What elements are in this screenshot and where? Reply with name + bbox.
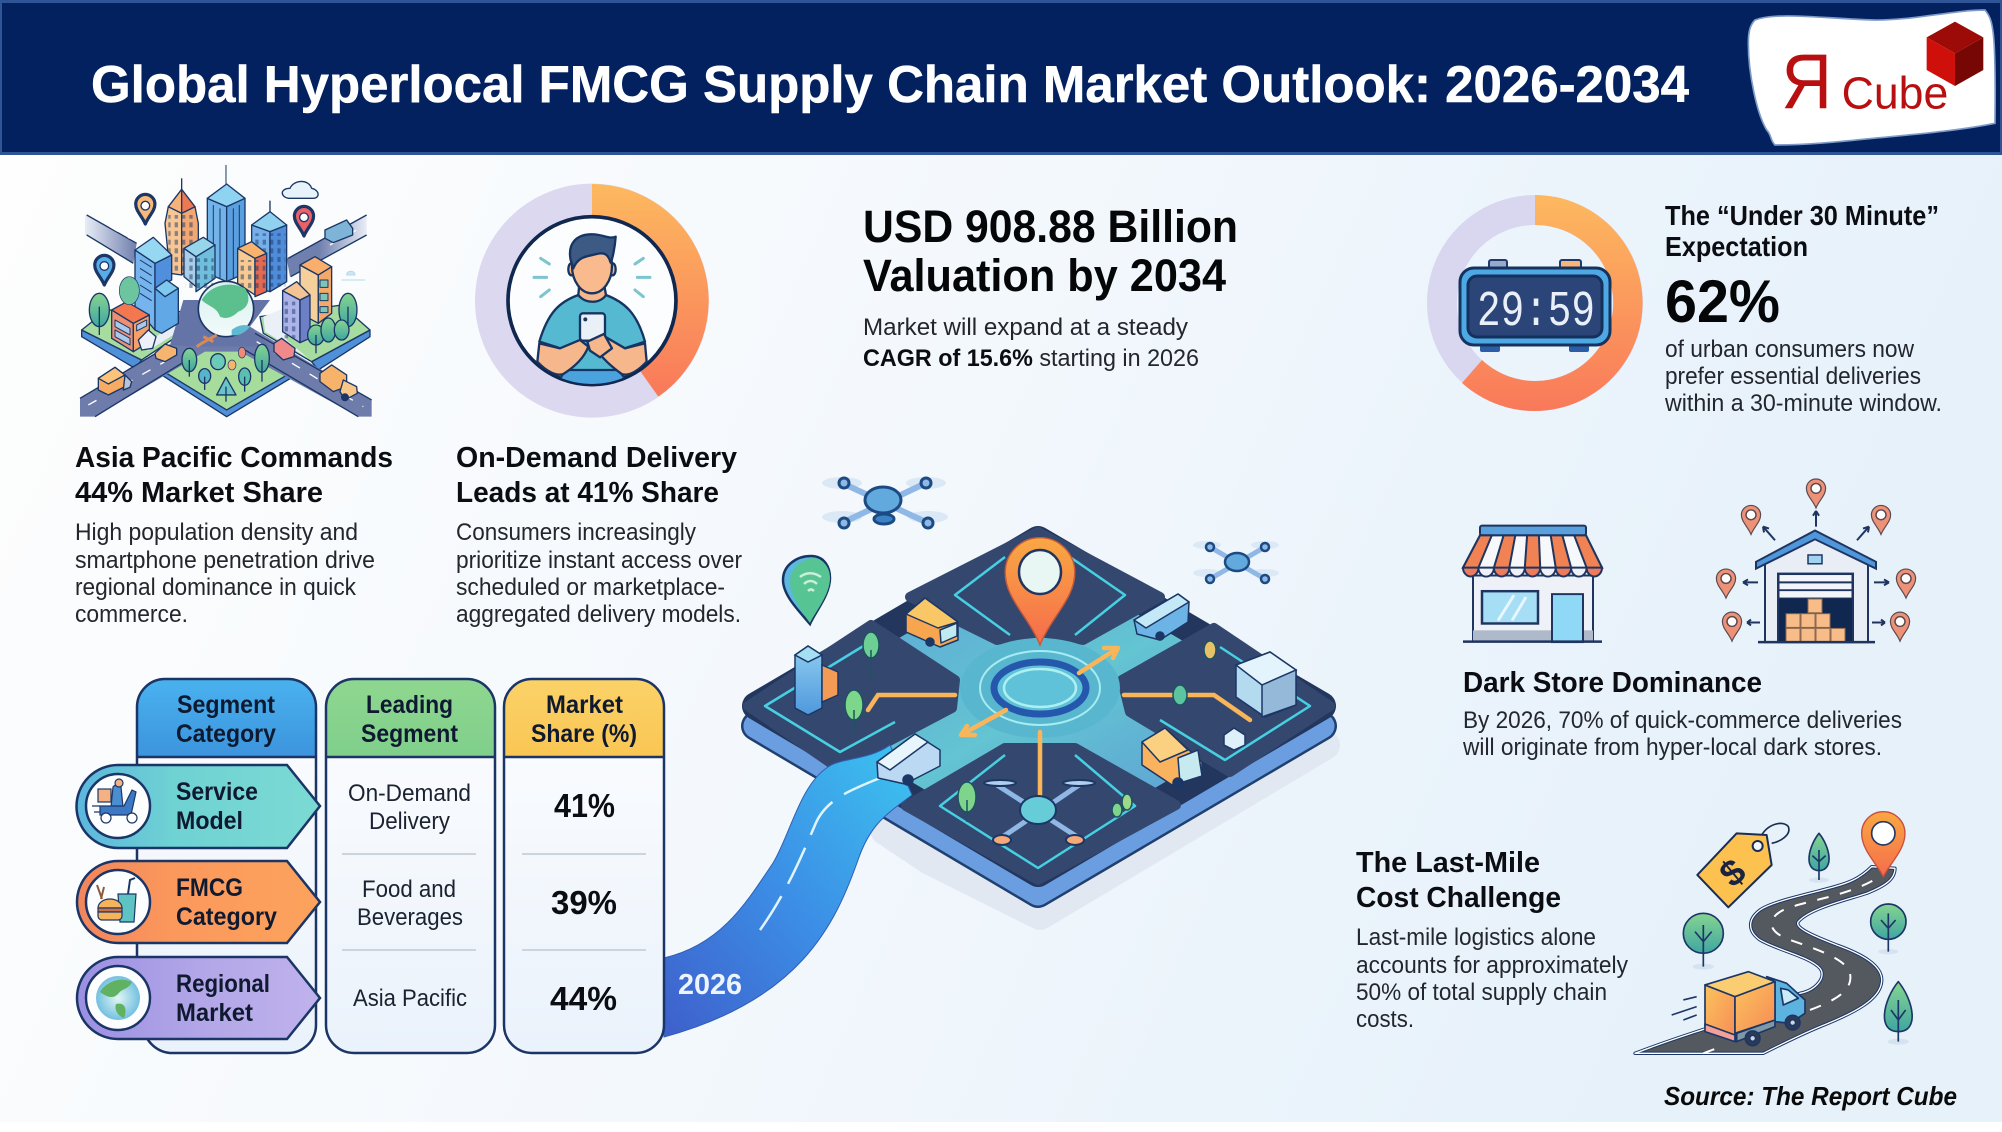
- panel: Asia Pacific: regional dominance in quick: [75, 574, 357, 601]
- central isometric delivery platform: [664, 532, 1330, 1037]
- orange route lines: [868, 648, 1250, 797]
- icon: floating drone small: [1193, 541, 1279, 583]
- panel: under 30 minute expectation: of urban consumers now: [1665, 336, 1915, 363]
- roads: [80, 215, 372, 417]
- table: leading segment column: On-Demand: [348, 780, 471, 807]
- headline stat: valuation: Valuation by 2034: [863, 250, 1226, 301]
- source note: Source: The Report Cube: [1664, 1081, 1957, 1111]
- panel: dark store dominance: By 2026, 70% of quick-commerce deliveries: [1463, 707, 1902, 734]
- table: leading segment column: Delivery: [369, 808, 450, 835]
- panel: on-demand delivery: [456, 442, 742, 628]
- panel: last-mile cost challenge: costs.: [1356, 1006, 1414, 1033]
- table: market share column: Share (%): [531, 720, 637, 748]
- purple building: [283, 282, 310, 343]
- panel: last-mile cost challenge: 50% of total supply chain: [1356, 979, 1607, 1006]
- panel: under 30 minute expectation: prefer essential deliveries: [1665, 363, 1921, 390]
- headline stat: valuation: CAGR of 15.6% starting in 2026: [863, 345, 1199, 372]
- panel: dark store dominance: [1462, 667, 1902, 761]
- trees on blocks: [845, 632, 1216, 822]
- table: leading segment column: [326, 679, 495, 1053]
- row pill: FMCG category: [77, 861, 320, 943]
- icon: digital clock: [1460, 260, 1610, 352]
- row pill: FMCG category: FMCG: [176, 874, 243, 902]
- panel: Asia Pacific: commerce.: [75, 601, 188, 628]
- table: market share column: [504, 679, 664, 1053]
- row pill: service model: Service: [176, 778, 258, 806]
- table: leading segment column: Food and: [362, 876, 456, 903]
- orange tower far right: [300, 257, 332, 323]
- icon: delivery scooter: [92, 779, 137, 823]
- headline stat: valuation: Market will expand at a steady: [863, 314, 1188, 341]
- title: Global Hyperlocal FMCG Supply Chain Market Outlook: 2026-2034: [91, 56, 1689, 114]
- icon: globe: [96, 976, 140, 1020]
- icon: isometric Asia Pacific city: [80, 165, 372, 417]
- panel: under 30 minute expectation: The “Under 30 Minute”: [1665, 200, 1939, 231]
- icon: warehouse with delivery pins: [1716, 479, 1916, 642]
- ribbon lane arrow: [760, 778, 880, 930]
- price tag: [1697, 823, 1789, 907]
- logo: RCube: Cube: [1842, 67, 1948, 118]
- icon: winding road with truck and price tag: [1635, 812, 1912, 1053]
- panel: on-demand delivery: scheduled or marketplace-: [456, 574, 725, 601]
- lane dashes: [88, 227, 363, 407]
- panel: on-demand delivery: prioritize instant access over: [456, 547, 742, 574]
- table: market share column: Market: [546, 691, 624, 719]
- table: leading segment column: Segment: [361, 720, 459, 748]
- row pill: FMCG category: Category: [176, 903, 277, 931]
- panel: last-mile cost challenge: accounts for approximately: [1356, 952, 1628, 979]
- label on ribbon: 2026: 2026: [678, 969, 742, 1001]
- platform shadow: [885, 590, 1325, 915]
- table: leading segment column: Beverages: [357, 904, 463, 931]
- vehicles: [877, 594, 1202, 788]
- skyscraper center: [207, 165, 245, 282]
- globe: [197, 281, 254, 347]
- panel: under 30 minute expectation: 62%: [1665, 268, 1780, 335]
- road ribbon from 2026: [664, 745, 912, 1037]
- donut chart: 62% with clock: [1442, 195, 1643, 411]
- red small building: [112, 302, 149, 352]
- headline stat: valuation: [863, 201, 1238, 372]
- neon lines on blocks: [765, 557, 1310, 868]
- icon: digital clock: 29:59: [1477, 284, 1595, 341]
- panel: Asia Pacific: smartphone penetration drive: [75, 547, 375, 574]
- panel: on-demand delivery: aggregated delivery models.: [456, 601, 741, 628]
- bottom white strip: [0, 1122, 2002, 1132]
- headline stat: valuation: USD 908.88 Billion: [863, 201, 1238, 252]
- panel: under 30 minute expectation: Expectation: [1665, 231, 1808, 262]
- truck: [1672, 972, 1805, 1046]
- blue tower right: [252, 201, 287, 292]
- platform side: [756, 558, 1322, 893]
- row pill: regional market: [77, 957, 320, 1039]
- logo: RCube: Я: [1781, 39, 1832, 125]
- icon: person with phone: [534, 234, 650, 393]
- panel: Asia Pacific: 44% Market Share: [75, 477, 323, 509]
- panel: on-demand delivery: Leads at 41% Share: [456, 477, 719, 509]
- icon: wifi shield: [783, 556, 830, 624]
- trees: [1683, 833, 1912, 1045]
- bottom drone: [984, 780, 1095, 845]
- panel: Asia Pacific: [75, 442, 393, 628]
- trucks and cars: [98, 220, 357, 401]
- row pill: service model: Model: [176, 807, 243, 835]
- orange spire tower: [165, 178, 198, 275]
- blocks: [748, 532, 1330, 880]
- header band: [0, 0, 2002, 155]
- road edges: [80, 215, 372, 417]
- table: market share column: 44%: [550, 980, 617, 1017]
- icon: burger and drink: [97, 878, 136, 922]
- table: leading segment column: Leading: [366, 691, 453, 719]
- panel: on-demand delivery: On-Demand Delivery: [456, 442, 737, 474]
- panel: dark store dominance: will originate from hyper-local dark stores.: [1462, 734, 1882, 761]
- row pill: regional market: Regional: [176, 970, 270, 998]
- donut chart: on-demand 41% with person: [492, 184, 709, 401]
- cloud: [282, 181, 318, 198]
- panel: dark store dominance: Dark Store Dominance: [1463, 667, 1762, 699]
- big location pin: [1005, 538, 1075, 645]
- table: market share column: 41%: [554, 787, 615, 824]
- small buildings: [795, 646, 1296, 750]
- trees: [89, 277, 357, 402]
- panel: last-mile cost challenge: Last-mile logistics alone: [1356, 924, 1596, 951]
- central hub plaza: [960, 638, 1120, 738]
- light blue mid building: [184, 237, 215, 292]
- panel: on-demand delivery: Consumers increasingly: [456, 519, 696, 546]
- panel: under 30 minute expectation: within a 30-minute window.: [1664, 390, 1942, 417]
- row pill: service model: [76, 765, 320, 848]
- blue left tower: [135, 237, 178, 333]
- panel: last-mile cost challenge: [1356, 847, 1628, 1033]
- icon: floating drone large: [822, 477, 948, 528]
- row pill: regional market: Market: [176, 999, 254, 1027]
- panel: last-mile cost challenge: The Last-Mile: [1356, 847, 1540, 879]
- icon: dark store storefront: [1463, 526, 1602, 642]
- logo: RCube: [1748, 10, 1995, 145]
- platform top: [756, 540, 1322, 873]
- pins: [95, 194, 314, 285]
- panel: Asia Pacific: High population density and: [75, 519, 358, 546]
- orange mid tower: [238, 242, 267, 297]
- panel: last-mile cost challenge: Cost Challenge: [1356, 882, 1561, 914]
- panel: under 30 minute expectation: [1664, 200, 1942, 417]
- table: segment column: Category: [176, 720, 276, 748]
- panel: Asia Pacific: Asia Pacific Commands: [75, 442, 393, 474]
- table: leading segment column: Asia Pacific: [353, 985, 467, 1012]
- table: segment column: [137, 679, 316, 1053]
- road: [1635, 867, 1895, 1053]
- table: segment column: Segment: [177, 691, 276, 719]
- table: market share column: 39%: [551, 884, 617, 921]
- destination pin: [1862, 812, 1905, 877]
- price tag: $: [1712, 851, 1754, 895]
- land sides and tops: [82, 305, 370, 417]
